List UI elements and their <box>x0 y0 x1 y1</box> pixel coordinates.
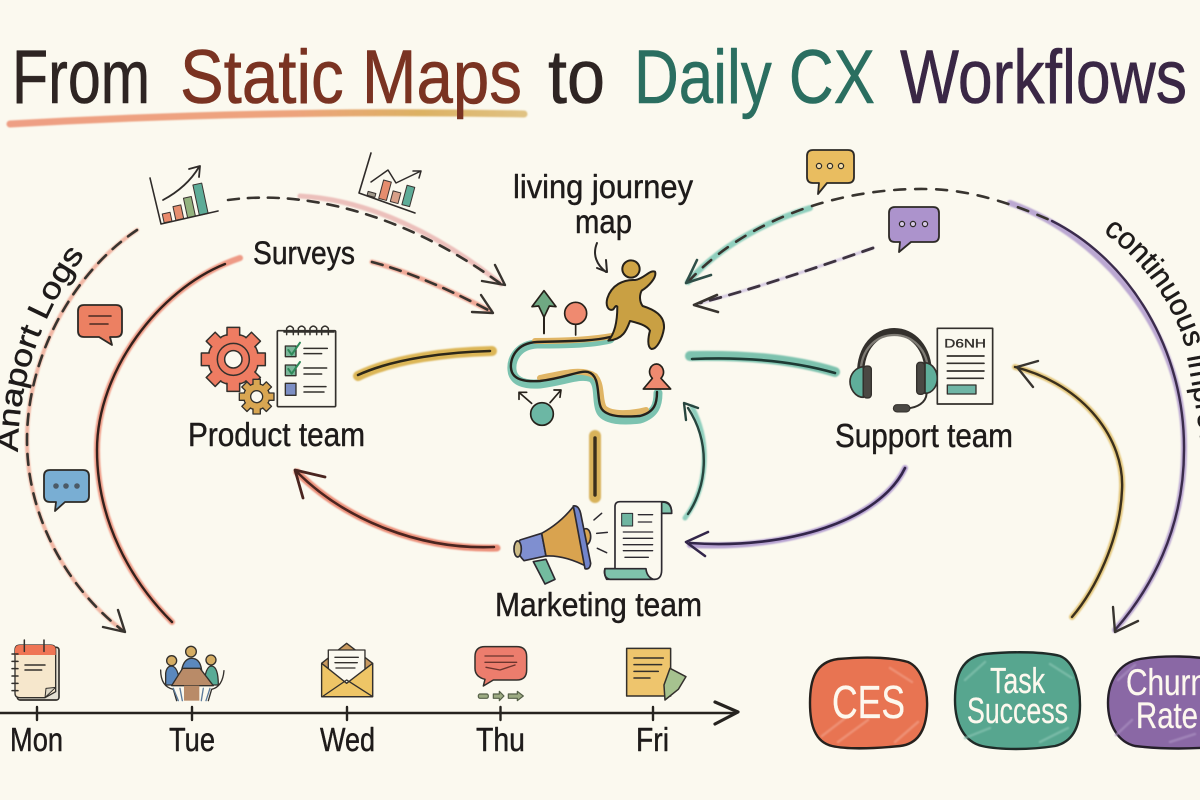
metric: Churn Rate <box>1108 656 1200 748</box>
arrow: gold solid from metrics to support <box>1015 361 1122 617</box>
icon: rising bar chart <box>150 166 218 224</box>
icon: runner <box>607 260 664 349</box>
winding journey path <box>511 336 658 420</box>
title <box>10 35 1187 124</box>
label: Tue: Tue <box>169 721 215 758</box>
icon: purple chat bubble <box>889 207 939 252</box>
icon: headset and ticket: D6NH <box>944 337 986 351</box>
day: wednesday <box>320 643 375 758</box>
arrow: dashed arc from chart to journey map <box>228 196 505 285</box>
label: Fri: Fri <box>636 721 669 758</box>
label: Thu: Thu <box>476 721 525 758</box>
icon: coral chat bubble <box>78 305 122 345</box>
timeline <box>0 640 738 758</box>
metric: Task Success: Task <box>990 660 1046 701</box>
label: living journey map: map <box>575 203 632 240</box>
metric: Task Success <box>955 652 1080 749</box>
label: support team: Support team <box>835 417 1013 454</box>
arrow: analytics logs dashed arc to Monday <box>27 230 137 632</box>
arrow: dashed surveys to journey map <box>372 262 493 313</box>
arrow: marketing to product <box>295 470 497 548</box>
label: marketing team: Marketing team <box>495 586 702 623</box>
connector: map to marketing <box>589 436 601 497</box>
label: Wed: Wed <box>320 721 375 758</box>
arrow: label to runner <box>595 243 607 272</box>
label: living journey map <box>513 168 693 240</box>
arrow: support to marketing <box>686 468 905 556</box>
label: Mon: Mon <box>10 721 63 758</box>
day: friday <box>627 648 686 758</box>
label: product team: Product team <box>188 416 365 453</box>
icon: fluctuating bar chart <box>359 153 421 213</box>
icon: gears and checklist <box>201 326 336 414</box>
connector: product to map <box>358 351 492 376</box>
connector: map to support <box>690 356 835 373</box>
label: living journey map: living journey <box>513 168 693 205</box>
label: surveys: Surveys <box>253 235 355 271</box>
arrow: purple dashed from chat bubble <box>694 248 873 312</box>
title: Daily CX <box>634 35 875 120</box>
title: Static Maps <box>180 35 522 120</box>
team: support <box>835 328 1013 454</box>
team: product <box>188 326 365 453</box>
icon: blue chat bubble <box>44 470 89 511</box>
central living journey map <box>511 260 671 425</box>
title: From <box>12 35 150 120</box>
metric: CES: CES <box>832 676 905 728</box>
day: thursday <box>475 647 527 758</box>
arrow: marketing to map <box>684 403 704 518</box>
day: monday <box>10 640 63 758</box>
arrow: solid coral arc from Tuesday to Surveys <box>97 258 240 622</box>
metric: Task Success: Success <box>967 690 1068 731</box>
title: to <box>548 35 605 120</box>
icon: yellow chat bubble <box>807 150 854 194</box>
icon: headset and ticket <box>850 328 993 412</box>
title underline <box>10 113 524 124</box>
arrow: long dashed arc from churn rate to journey map <box>686 189 1184 632</box>
day: tuesday <box>161 646 224 758</box>
icon: megaphone and scroll <box>514 502 672 584</box>
team: marketing <box>495 502 702 623</box>
icon: milestones <box>519 291 671 425</box>
metric: CES <box>810 658 927 748</box>
